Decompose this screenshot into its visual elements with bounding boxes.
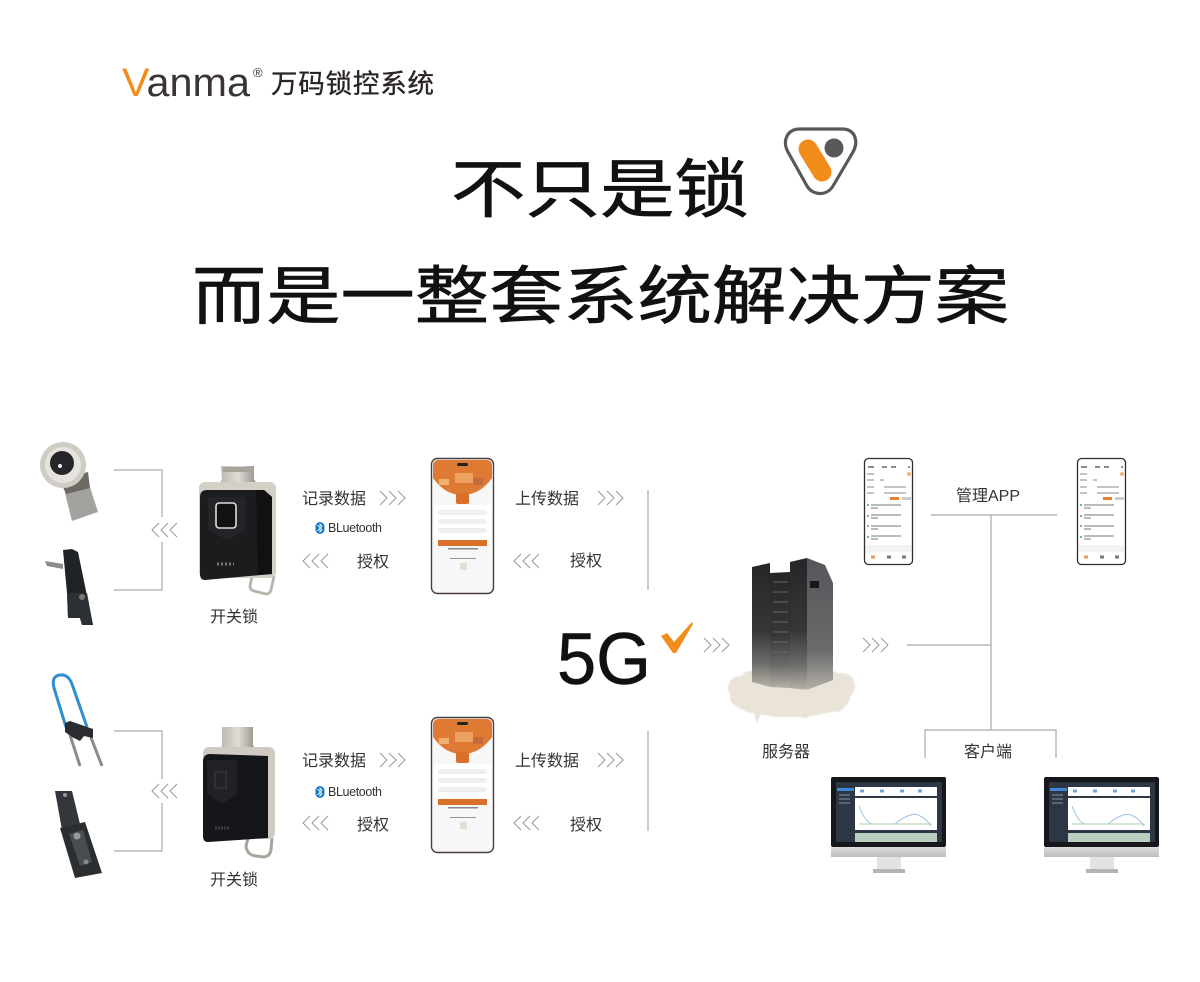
title: line one: 不只是锁: [451, 154, 749, 226]
divider: lower: [647, 731, 649, 831]
logo: Vanma wordmark: ®: [253, 65, 263, 80]
title: line two: 而是一整套系统解决方案: [192, 260, 1009, 332]
label: authorise two: 授权: [570, 552, 602, 570]
bracket: upper lock group: [114, 470, 162, 590]
arrow: authorise chevrons three: [303, 816, 328, 830]
arrow: record data chevrons: [380, 491, 405, 505]
label: client: 客户端: [964, 743, 1012, 761]
label: record data two: 记录数据: [302, 752, 366, 770]
arrow: authorise chevrons two: [514, 554, 539, 568]
arrow: lower left chevrons: [152, 784, 177, 798]
arrow: authorise chevrons: [303, 554, 328, 568]
label: upload data: 上传数据: [515, 490, 579, 508]
logo: Vanma wordmark: Vanma: [122, 61, 251, 105]
product: shackle lock: [53, 675, 102, 766]
label: 5G: 5G: [557, 619, 651, 700]
logo: Vanma wordmark: 万码锁控系统: [271, 69, 434, 99]
phone: login app one: [432, 458, 494, 594]
label: switch lock two: 开关锁: [210, 871, 258, 889]
arrow: server chevrons: [863, 638, 888, 652]
icon: Bluetooth: [316, 522, 324, 534]
phone: management app left: [864, 458, 912, 564]
label: authorise: 授权: [357, 553, 389, 571]
product: switch lock one: [199, 466, 276, 594]
product: latch lock: [55, 791, 102, 878]
label: authorise four: 授权: [570, 816, 602, 834]
phone: login app two: [432, 718, 494, 852]
product: switch lock two: [203, 727, 275, 857]
label: switch lock one: 开关锁: [210, 608, 258, 626]
phone: management app right: [1078, 458, 1126, 564]
divider: upper: [647, 490, 649, 590]
arrow: upper left chevrons: [152, 523, 177, 537]
label: upload data two: 上传数据: [515, 752, 579, 770]
icon: Bluetooth two: [316, 786, 324, 798]
connector: network lines: [907, 515, 1057, 758]
arrow: 5G to server chevrons: [704, 638, 729, 652]
icon: server on cloud: [728, 558, 855, 723]
product: cam lock: [40, 442, 98, 521]
product: handle lock: [45, 549, 93, 625]
label: management app: 管理APP: [956, 487, 1020, 505]
bracket: lower lock group: [114, 731, 162, 851]
icon: Vanma triangle mark: [785, 129, 856, 194]
logo: Vanma wordmark: [122, 61, 434, 105]
label: Bluetooth: BLuetooth: [328, 521, 382, 535]
icon: orange check: [661, 622, 693, 653]
arrow: upload chevrons: [598, 491, 623, 505]
monitor: dashboard left: [831, 777, 946, 873]
label: server: 服务器: [762, 743, 810, 761]
arrow: authorise chevrons four: [514, 816, 539, 830]
arrow: record data chevrons two: [380, 753, 405, 767]
monitor: dashboard right: [1044, 777, 1159, 873]
label: authorise three: 授权: [357, 816, 389, 834]
label: record data: 记录数据: [302, 490, 366, 508]
arrow: upload chevrons two: [598, 753, 623, 767]
label: Bluetooth two: BLuetooth: [328, 785, 382, 799]
